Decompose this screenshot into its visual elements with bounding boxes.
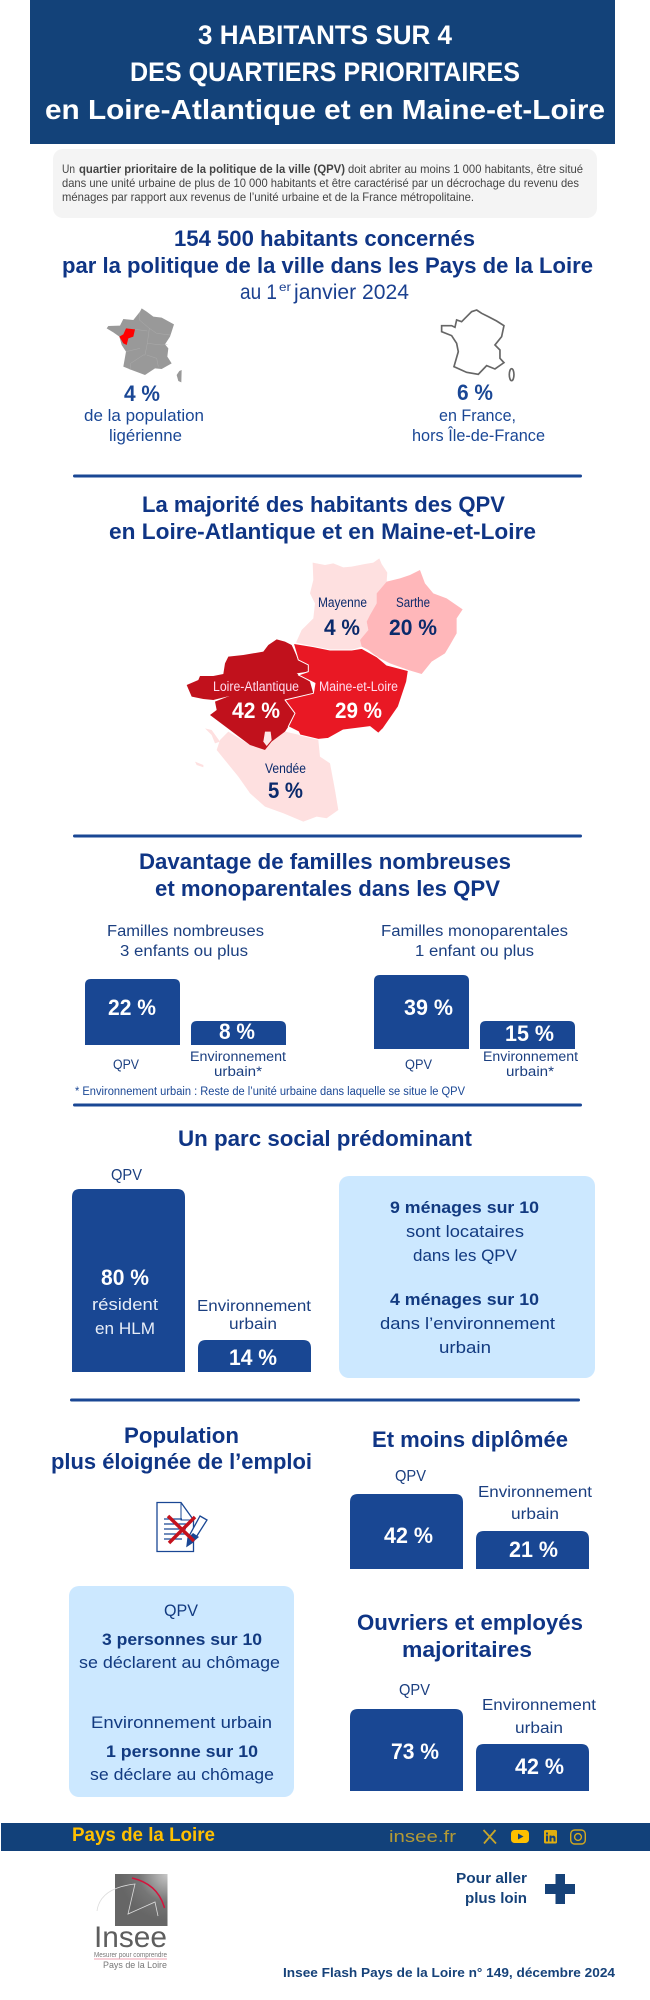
bar chart: familles monoparentales: Familles monoparentales	[381, 923, 568, 940]
label: Sarthe	[389, 595, 437, 640]
bar chart: familles monoparentales: QPV	[405, 1057, 432, 1072]
bar chart: HLM: urbain	[229, 1316, 277, 1333]
heading: parc social: Un parc social prédominant	[178, 1126, 473, 1151]
bar chart: HLM	[72, 1167, 312, 1372]
heading: diplômée: Et moins diplômée	[372, 1427, 568, 1452]
heading: habitants concernés: er	[279, 280, 291, 294]
stat: 4 % de la population ligérienne: 4 %	[124, 381, 160, 406]
stat: 4 % de la population ligérienne: de la population	[84, 407, 204, 425]
label: Loire-Atlantique: 42 %	[232, 698, 280, 723]
heading: ouvriers et employés: majoritaires	[402, 1637, 532, 1662]
label: Sarthe: Sarthe	[396, 595, 430, 610]
logo: Insee: Pays de la Loire	[103, 1960, 167, 1970]
link: pour aller plus loin	[456, 1870, 575, 1907]
bar chart: diplômes: 42 %	[384, 1523, 433, 1548]
heading: familles: et monoparentales dans les QPV	[155, 876, 500, 901]
bar chart: familles nombreuses: QPV	[113, 1057, 139, 1072]
panel: chômage: se déclare au chômage	[90, 1766, 274, 1784]
panel: chômage: 1 personne sur 10	[106, 1743, 258, 1761]
bar chart: ouvriers et employés: QPV	[399, 1682, 431, 1699]
definition box: dans une unité urbaine de plus de 10 000 habitants et être caractérisé par un décrochage du revenu des	[62, 176, 579, 190]
stat: 6 % en France hors Île-de-France: en France,	[439, 407, 516, 425]
bar chart: ouvriers et employés: urbain	[515, 1720, 563, 1737]
footer band: insee.fr	[389, 1828, 457, 1846]
stat: 6 % en France hors Île-de-France	[412, 380, 545, 445]
stat: 4 % de la population ligérienne: ligérienne	[109, 427, 182, 445]
heading: habitants concernés: 154 500 habitants concernés	[174, 226, 475, 251]
label: Mayenne: 4 %	[324, 615, 360, 640]
footer band	[1, 1823, 650, 1851]
bar chart: HLM: Environnement	[197, 1298, 312, 1315]
panel: chômage: 3 personnes sur 10	[102, 1631, 262, 1649]
heading: ouvriers et employés	[357, 1610, 583, 1662]
definition box	[53, 149, 597, 218]
panel: ménages locataires: urbain	[439, 1339, 491, 1357]
bar chart: diplômes: 21 %	[509, 1537, 558, 1562]
panel: ménages locataires: 9 ménages sur 10	[390, 1199, 539, 1217]
definition box: Un	[62, 162, 75, 176]
heading: majorité des habitants: en Loire-Atlantique et en Maine-et-Loire	[109, 519, 536, 544]
label: Loire-Atlantique: Loire-Atlantique	[213, 679, 299, 694]
logo: Insee	[94, 1874, 168, 1970]
bar chart: familles nombreuses	[85, 923, 286, 1079]
panel: ménages locataires: 4 ménages sur 10	[390, 1291, 539, 1309]
panel: ménages locataires: dans l’environnement	[380, 1315, 555, 1333]
label: Maine-et-Loire: Maine-et-Loire	[319, 679, 398, 694]
bar chart: diplômes: Environnement	[478, 1484, 593, 1501]
bar chart: HLM: 80 %	[101, 1265, 149, 1290]
heading: emploi: plus éloignée de l’emploi	[51, 1449, 312, 1474]
bar chart: ouvriers et employés: 42 %	[515, 1754, 564, 1779]
title banner: en Loire-Atlantique et en Maine-et-Loire	[45, 94, 605, 125]
bar chart: familles nombreuses: Environnement	[190, 1049, 286, 1064]
label: Mayenne	[318, 595, 367, 640]
icon: X	[484, 1830, 496, 1844]
bar chart: ouvriers et employés: 73 %	[391, 1739, 439, 1764]
label: Loire-Atlantique	[213, 679, 299, 723]
logo: Insee: Insee	[94, 1921, 167, 1954]
heading: emploi: Population	[124, 1423, 239, 1448]
bar chart: ouvriers et employés	[350, 1682, 597, 1791]
logo: Insee: Mesurer pour comprendre	[94, 1952, 167, 1959]
panel: ménages locataires: dans les QPV	[413, 1247, 517, 1265]
icon: CV barré	[157, 1502, 207, 1552]
definition box: ménages par rapport aux revenus de l’unité urbaine et de la France métropolitaine.	[62, 190, 474, 204]
stat: 4 % de la population ligérienne	[84, 381, 204, 445]
label: Sarthe: 20 %	[389, 615, 437, 640]
bar chart: familles nombreuses: urbain*	[214, 1064, 263, 1079]
panel: chômage: se déclarent au chômage	[79, 1654, 280, 1672]
heading: habitants concernés: au 1	[240, 281, 277, 304]
bar chart: familles nombreuses: 22 %	[108, 995, 156, 1020]
panel: ménages locataires: sont locataires	[406, 1223, 524, 1241]
link: pour aller plus loin: Pour aller	[456, 1870, 527, 1887]
bar chart: familles monoparentales: 15 %	[505, 1021, 554, 1046]
heading: habitants concernés: par la politique de la ville dans les Pays de la Loire	[62, 253, 593, 278]
bar chart: familles monoparentales: Environnement	[483, 1049, 578, 1064]
title banner	[30, 0, 615, 144]
map: France outline	[442, 310, 514, 381]
footnote: * Environnement urbain : Reste de l’unité urbaine dans laquelle se situe le QPV	[75, 1086, 465, 1098]
definition box: quartier prioritaire de la politique de la ville (QPV)	[79, 162, 345, 176]
bar chart: ouvriers et employés: Environnement	[482, 1697, 597, 1714]
map: France with Pays de la Loire highlighted	[107, 308, 182, 382]
icon: YouTube	[511, 1830, 529, 1843]
bar chart: HLM: QPV	[111, 1167, 143, 1184]
footer band: Pays de la Loire	[72, 1825, 215, 1846]
label: Maine-et-Loire	[319, 679, 398, 723]
bar chart: familles monoparentales	[374, 923, 578, 1079]
label: Vendée: Vendée	[265, 761, 306, 776]
heading: majorité des habitants: La majorité des habitants des QPV	[142, 492, 505, 517]
icon: plus	[545, 1874, 575, 1904]
definition box: doit abriter au moins 1 000 habitants, être situé	[348, 162, 583, 176]
heading: familles: Davantage de familles nombreuses	[139, 849, 511, 874]
heading: familles	[139, 849, 511, 901]
label: Maine-et-Loire: 29 %	[335, 698, 382, 723]
heading: habitants concernés: janvier 2024	[293, 281, 409, 304]
bar chart: familles monoparentales: urbain*	[506, 1064, 555, 1079]
title banner: 3 HABITANTS SUR 4	[198, 20, 452, 50]
heading: habitants concernés	[62, 226, 593, 304]
heading: majorité des habitants	[109, 492, 536, 544]
bar chart: familles monoparentales: 39 %	[404, 995, 453, 1020]
icon: LinkedIn	[544, 1830, 557, 1844]
source line: Insee Flash Pays de la Loire n° 149, décembre 2024	[283, 1965, 616, 1980]
bar chart: HLM: en HLM	[95, 1320, 155, 1338]
heading: emploi	[51, 1423, 312, 1474]
stat: 6 % en France hors Île-de-France: 6 %	[457, 380, 493, 405]
bar chart: HLM: résident	[92, 1296, 158, 1314]
bar chart: HLM: 14 %	[229, 1345, 277, 1370]
bar chart: familles nombreuses: 8 %	[219, 1019, 255, 1044]
icon: Instagram	[571, 1830, 585, 1844]
panel: ménages locataires	[339, 1176, 595, 1378]
bar chart: familles nombreuses: Familles nombreuses	[107, 923, 264, 940]
bar chart: familles nombreuses: 3 enfants ou plus	[120, 943, 248, 960]
map: départements	[187, 558, 463, 822]
heading: ouvriers et employés: Ouvriers et employés	[357, 1610, 583, 1635]
bar chart: familles monoparentales: 1 enfant ou plus	[415, 943, 534, 960]
panel: chômage: Environnement urbain	[91, 1714, 272, 1732]
label: Vendée: 5 %	[268, 778, 303, 803]
stat: 6 % en France hors Île-de-France: hors Île-de-France	[412, 426, 545, 445]
link: pour aller plus loin: plus loin	[465, 1890, 527, 1907]
bar chart: diplômes: urbain	[511, 1506, 559, 1523]
panel: chômage	[69, 1586, 294, 1797]
title banner: DES QUARTIERS PRIORITAIRES	[130, 57, 520, 87]
panel: chômage: QPV	[164, 1602, 198, 1620]
bar chart: diplômes	[350, 1468, 593, 1569]
label: Mayenne: Mayenne	[318, 595, 367, 610]
label: Vendée	[265, 761, 306, 803]
bar chart: diplômes: QPV	[395, 1468, 427, 1485]
